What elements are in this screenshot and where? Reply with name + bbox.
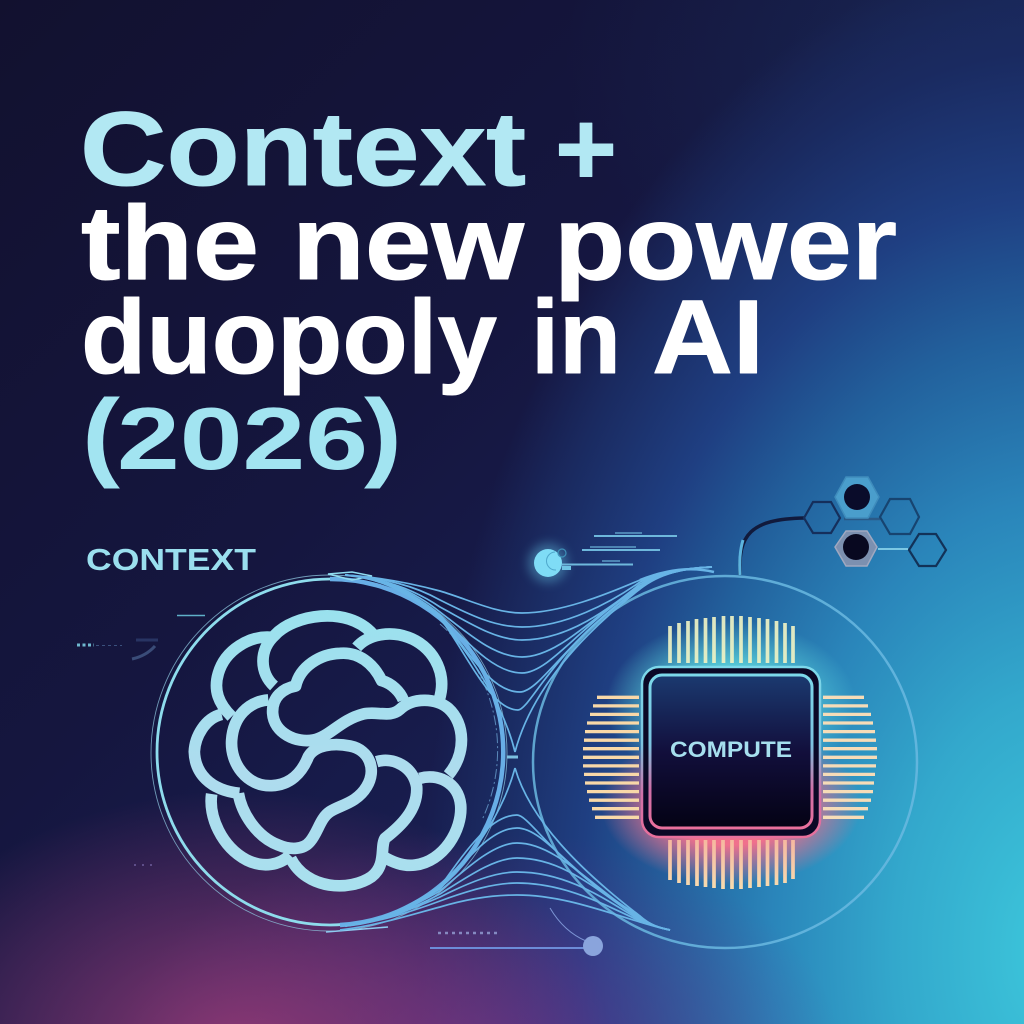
title line: (2026): [82, 379, 402, 489]
hexagon solid 1: [835, 477, 879, 518]
title line: the new power: new: [292, 185, 524, 302]
title line: the new power: power: [554, 185, 897, 302]
title line: Context +: Context: [80, 91, 526, 208]
title line: Context +: +: [555, 91, 617, 208]
title line: duopoly in AI: duopoly: [81, 279, 497, 396]
title line: duopoly in AI: in: [531, 279, 621, 396]
title line: the new power: the: [81, 185, 259, 302]
chip pins: [583, 616, 877, 889]
data ticks left of context circle: [77, 616, 205, 865]
hexagon outline 2: [880, 499, 919, 534]
chip: [642, 667, 820, 837]
bottom slider with node: [430, 908, 603, 956]
title line: (2026): (: [82, 379, 120, 489]
hexagon outline 3: [909, 534, 946, 566]
title line: (2026): 2026: [117, 389, 368, 488]
left pins: [583, 697, 639, 817]
title line: the new power: [81, 185, 897, 302]
title line: duopoly in AI: AI: [652, 279, 764, 396]
title line: (2026): ): [364, 379, 402, 489]
context circle: [151, 572, 507, 932]
label: context: CONTEXT: [86, 542, 256, 577]
compute circle: [533, 576, 917, 948]
right pins: [823, 697, 877, 817]
bottom pins: [670, 840, 793, 889]
hexagon solid 2: [835, 531, 877, 566]
top pins: [670, 616, 793, 663]
hexagon outline 1: [804, 502, 840, 533]
title line: duopoly in AI: [81, 279, 764, 396]
title: [80, 91, 897, 489]
brain icon: [194, 616, 461, 886]
label: compute: COMPUTE: [670, 737, 792, 762]
icon: hexagon network: [740, 477, 946, 575]
chip glow: [601, 620, 861, 885]
flow lines between circles: [340, 567, 714, 930]
icon: glowing node with speed lines: [528, 533, 677, 583]
